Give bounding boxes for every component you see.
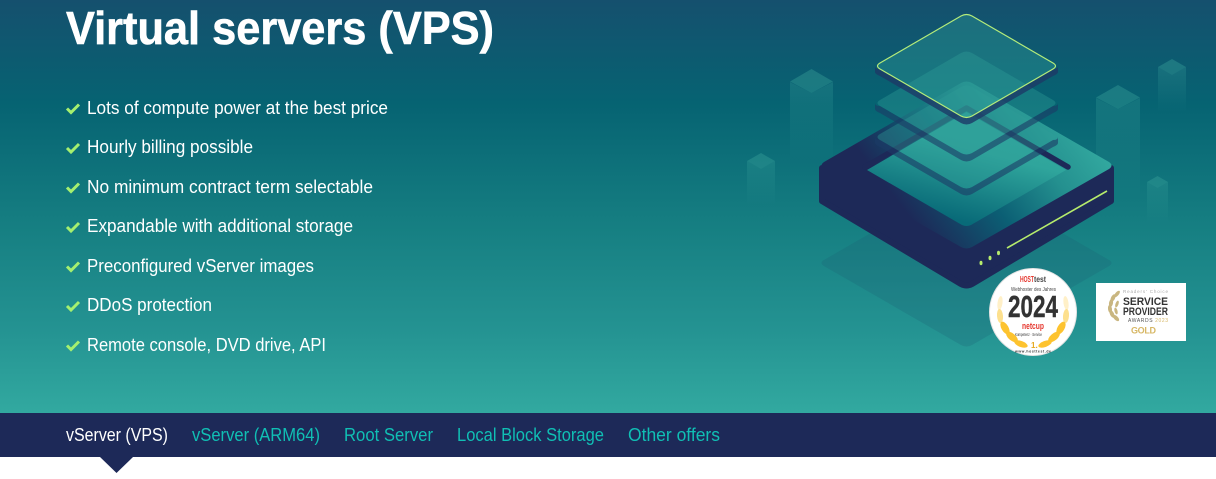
title: Virtual servers (VPS) — [66, 2, 494, 54]
feature: compute power: Lots of compute power at the best price — [87, 98, 388, 118]
inner panel — [867, 112, 1066, 226]
tower 2 — [1096, 85, 1140, 198]
badge: HOSTtest 2024: test — [1034, 275, 1046, 284]
server body — [822, 168, 1111, 286]
badge: Service Provider Awards: SERVICE — [1123, 296, 1168, 308]
badge: Service Provider Awards — [1096, 283, 1186, 341]
feature list — [67, 98, 388, 355]
badge: Service Provider Awards: AWARDS 2023 — [1128, 318, 1168, 324]
floating layer 1 (top) — [875, 14, 1058, 124]
badge: HOSTtest 2024: 1. — [1031, 341, 1038, 350]
feature: console: Remote console, DVD drive, API — [87, 335, 326, 355]
tower 1 — [790, 69, 833, 162]
badge: HOSTtest 2024: 2024 — [1008, 289, 1059, 324]
badge: Service Provider Awards: Readers' Choice — [1123, 289, 1168, 294]
tower 5 — [1147, 176, 1168, 224]
tab: Other offers: Other offers — [628, 425, 720, 445]
feature: hourly billing: Hourly billing possible — [87, 137, 253, 157]
feature: no minimum term: No minimum contract term selectable — [87, 177, 373, 197]
badge: Service Provider Awards: PROVIDER — [1123, 306, 1168, 318]
recessed slot — [865, 108, 1068, 167]
server shadow — [822, 180, 1112, 346]
status dots — [980, 251, 1000, 265]
server top face — [822, 82, 1112, 248]
floating layer 3 — [875, 86, 1058, 196]
tab: vServer (VPS): vServer (VPS) — [66, 425, 168, 445]
badge: HOSTtest 2024: HOST — [1020, 275, 1034, 284]
badge: HOSTtest 2024: Kompetenz · Service — [1015, 332, 1042, 337]
badge: HOSTtest 2024: Webhoster des Jahres — [1011, 287, 1056, 293]
feature: storage: Expandable with additional storage — [87, 216, 353, 236]
floating layer 2 — [875, 52, 1058, 162]
tab: vServer (ARM64): vServer (ARM64) — [192, 425, 320, 445]
background towers — [747, 59, 1186, 224]
tab: Local Block Storage: Local Block Storage — [457, 425, 604, 445]
badge: HOSTtest 2024 — [990, 268, 1076, 356]
wheat sprig — [1107, 290, 1121, 322]
navigation bar — [0, 413, 1216, 473]
active tab pointer — [100, 457, 133, 473]
tower 4 — [747, 153, 775, 206]
badge: HOSTtest 2024: netcup — [1022, 321, 1044, 331]
server base — [822, 82, 1112, 286]
badge: HOSTtest 2024: www.hosttest.de — [1014, 350, 1051, 354]
feature: DDoS: DDoS protection — [87, 295, 212, 315]
laurel wreath — [996, 296, 1070, 349]
tower 3 — [1158, 59, 1186, 112]
feature: images: Preconfigured vServer images — [87, 256, 314, 276]
badge: Service Provider Awards: GOLD — [1131, 326, 1156, 336]
status light bar — [1007, 191, 1107, 248]
tab: Root Server: Root Server — [344, 425, 433, 445]
